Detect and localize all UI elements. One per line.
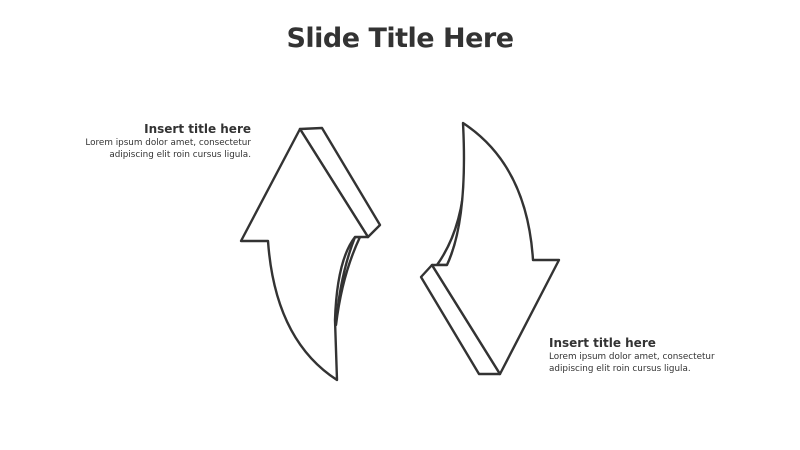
text block: left: Insert title here <box>144 122 251 136</box>
text block: right: Lorem ipsum dolor amet, consectetur <box>549 352 715 362</box>
text block: right: Insert title here <box>549 336 656 350</box>
text block: left: Lorem ipsum dolor amet, consectetur <box>85 138 251 148</box>
text block: left <box>85 122 251 160</box>
text block: right <box>549 336 715 374</box>
arrow: down <box>421 123 559 374</box>
title: Slide Title Here <box>286 23 514 54</box>
text block: left: adipiscing elit roin cursus ligula. <box>109 150 251 160</box>
arrow: up <box>241 128 380 380</box>
text block: right: adipiscing elit roin cursus ligula. <box>549 364 691 374</box>
